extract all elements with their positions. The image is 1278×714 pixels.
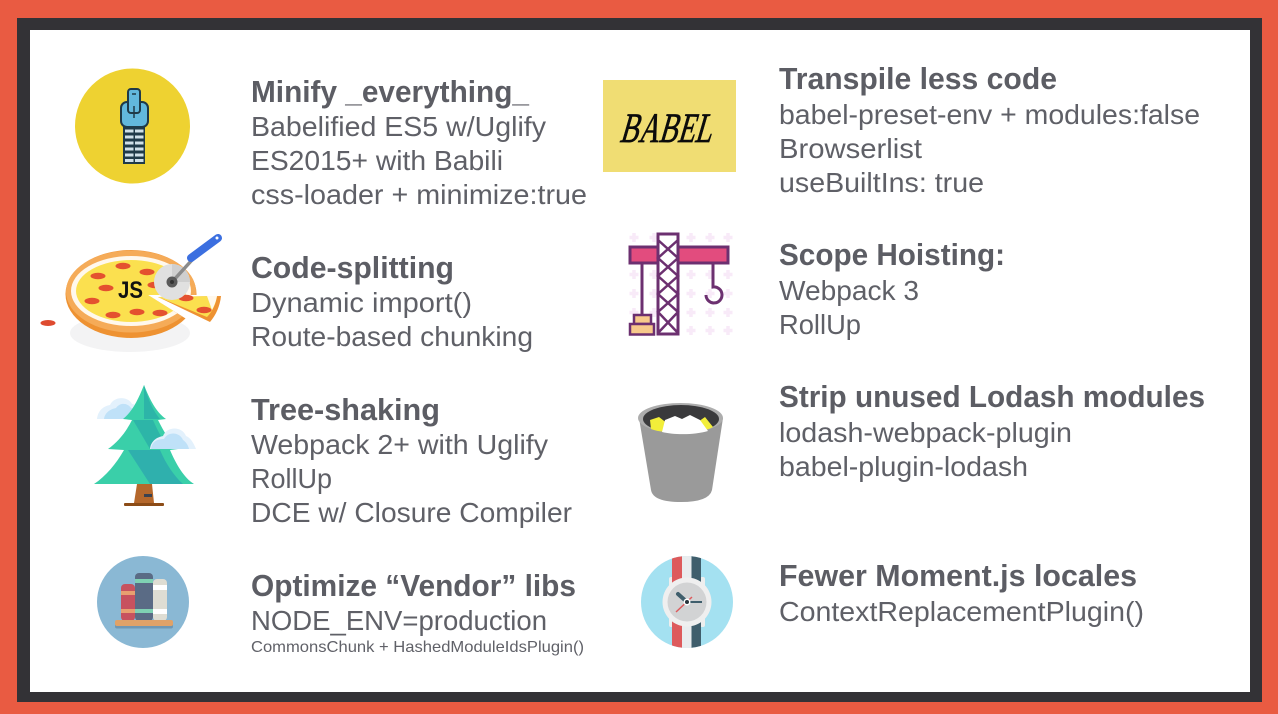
- text block: Fewer Moment.js locales: ContextReplacementPlugin(): [779, 596, 1144, 627]
- text block: Code-splitting: Route-based chunking: [251, 321, 533, 352]
- text block: Transpile less code: babel-preset-env + modules:false: [779, 99, 1200, 130]
- text block: Strip unused Lodash modules: lodash-webpack-plugin: [779, 417, 1072, 448]
- text block: Code-splitting: Dynamic import(): [251, 287, 472, 318]
- text block: Tree-shaking: Webpack 2+ with Uglify: [251, 429, 548, 460]
- pizza label: JS: [118, 277, 143, 304]
- text block: Strip unused Lodash modules: babel-plugin-lodash: [779, 451, 1028, 482]
- text block: Scope Hoisting: [779, 237, 1005, 340]
- icon: zipper on yellow circle: [75, 68, 190, 184]
- text block: Scope Hoisting: Webpack 3: [779, 275, 919, 306]
- text block: Minify everything: Babelified ES5 w/Uglify: [251, 111, 546, 142]
- text block: Optimize Vendor libs: CommonsChunk + HashedModuleIdsPlugin(): [251, 639, 584, 656]
- text block: Strip unused Lodash modules: Strip unused Lodash modules: [779, 379, 1205, 414]
- text block: Optimize Vendor libs: NODE_ENV=production: [251, 605, 547, 636]
- text block: Tree-shaking: DCE w/ Closure Compiler: [251, 497, 572, 528]
- text block: Transpile less code: [779, 61, 1200, 198]
- text block: Scope Hoisting: Scope Hoisting:: [779, 237, 1005, 272]
- text block: Transpile less code: Transpile less code: [779, 61, 1057, 96]
- icon: waste bin: [638, 403, 723, 502]
- text block: Optimize Vendor libs: Optimize “Vendor” libs: [251, 568, 576, 603]
- icon: Babel logo: [603, 80, 736, 172]
- icon: pine tree with clouds: [94, 385, 196, 506]
- icon: tower crane: [630, 233, 732, 335]
- text block: Tree-shaking: RollUp: [251, 463, 332, 494]
- text block: Tree-shaking: [251, 392, 572, 528]
- text block: Scope Hoisting: RollUp: [779, 309, 861, 340]
- text block: Minify everything: [251, 74, 587, 210]
- text block: Minify everything: Minify _everything_: [251, 74, 530, 109]
- text block: Code-splitting: [251, 250, 533, 352]
- text block: Code-splitting: Code-splitting: [251, 250, 454, 285]
- text block: Transpile less code: Browserlist: [779, 133, 922, 164]
- text block: Minify everything: css-loader + minimize:true: [251, 179, 587, 210]
- logo wordmark: BABEL: [616, 106, 721, 152]
- text block: Strip unused Lodash modules: [779, 379, 1205, 482]
- text block: Fewer Moment.js locales: Fewer Moment.js locales: [779, 558, 1137, 593]
- text block: Transpile less code: useBuiltIns: true: [779, 167, 984, 198]
- text block: Fewer Moment.js locales: [779, 558, 1144, 627]
- icon: books on blue circle: [97, 556, 189, 648]
- text block: Tree-shaking: Tree-shaking: [251, 392, 440, 427]
- icon: JS pizza with cutter: [40, 236, 221, 352]
- text block: Minify everything: ES2015+ with Babili: [251, 145, 503, 176]
- text block: Optimize Vendor libs: [251, 568, 584, 656]
- icon: wristwatch on blue circle: [641, 556, 733, 648]
